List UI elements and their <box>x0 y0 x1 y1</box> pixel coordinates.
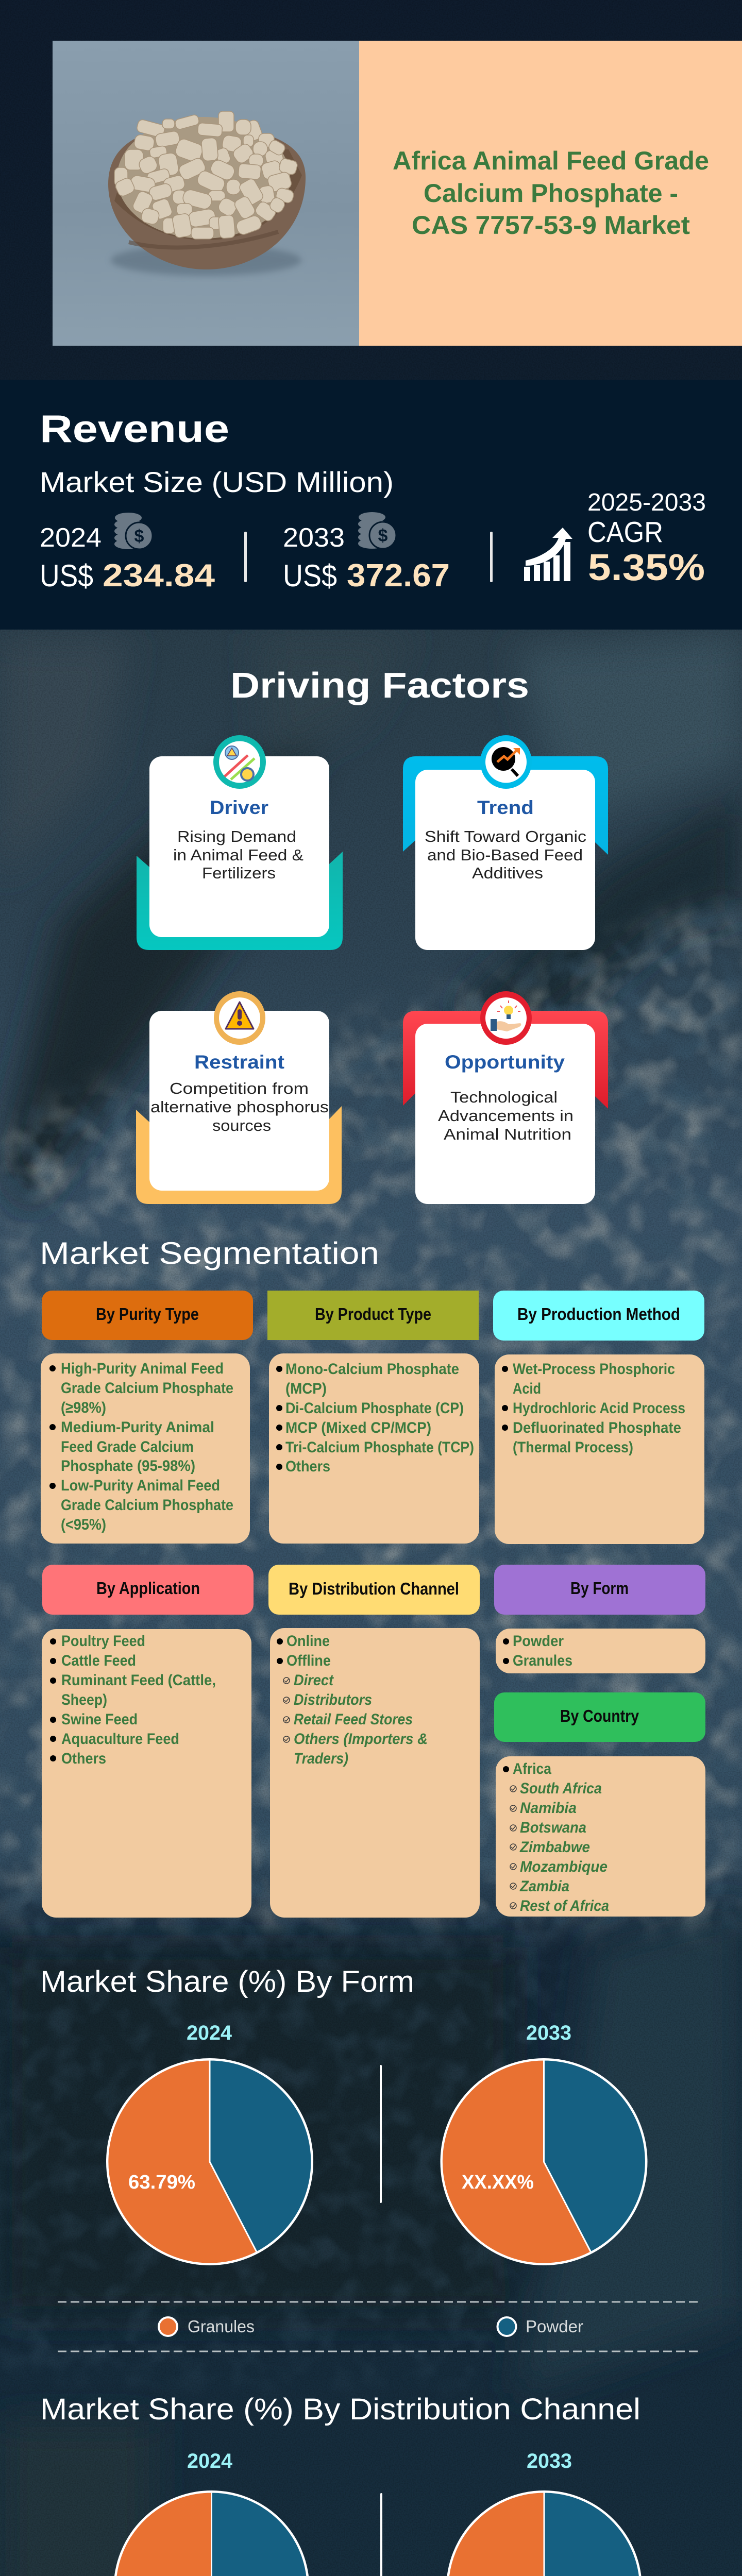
card: opportunity <box>403 991 608 1204</box>
segment: by form <box>494 1565 705 1673</box>
text: opportunity description: Technological <box>450 1088 558 1106</box>
segment: by purity type: Medium-Purity Animal <box>61 1419 214 1436</box>
subheading: market size: Market Size (USD Million) <box>40 466 394 498</box>
pie chart: form 2033: 2033 <box>526 2022 571 2044</box>
segment: by application: Sheep) <box>61 1691 107 1708</box>
icon: restraint <box>214 991 265 1045</box>
text: trend description <box>425 827 586 882</box>
card: driver <box>137 735 343 950</box>
text: restraint description: sources <box>212 1116 271 1134</box>
legend: form: Powder <box>526 2317 583 2336</box>
stat: cagr: CAGR <box>587 516 663 549</box>
segment: by purity type: Phosphate (95-98%) <box>61 1458 195 1475</box>
segment: by production method: Acid <box>513 1380 541 1397</box>
segment: by production method: Wet-Process Phosphoric <box>513 1361 675 1378</box>
segment: by production method: Hydrochloric Acid Process <box>513 1400 685 1417</box>
segment: by country: Zimbabwe <box>519 1839 590 1856</box>
segment: by production method: Defluorinated Phosphate <box>513 1419 681 1436</box>
segment: by product type: MCP (Mixed CP/MCP) <box>285 1419 431 1436</box>
segment: by distribution channel: Retail Feed Stores <box>294 1711 413 1728</box>
segment: by product type: Others <box>285 1458 330 1475</box>
segment: by form: Granules <box>513 1652 572 1669</box>
segment: by application: Swine Feed <box>61 1711 138 1728</box>
segment: by purity type: (<95%) <box>61 1516 106 1533</box>
page background <box>0 630 742 2576</box>
title block: Calcium Phosphate - <box>424 179 678 208</box>
pie chart: distribution 2024: 2024 <box>187 2450 233 2472</box>
stat: 2024: US$ <box>40 558 93 593</box>
pie chart: distribution 2024 <box>114 2450 308 2576</box>
stat: cagr: 5.35% <box>588 547 705 588</box>
segment: by application: Poultry Feed <box>61 1633 145 1650</box>
segment: by application: Cattle Feed <box>61 1652 136 1669</box>
icon: growth chart <box>524 528 572 581</box>
text: opportunity description: Advancements in <box>438 1107 574 1125</box>
stat: 2033: 372.67 <box>347 558 450 594</box>
segment: by application: Others <box>61 1750 106 1767</box>
icon: coins 2024 <box>114 513 153 549</box>
text: restraint description <box>150 1079 329 1134</box>
text: driver description: Fertilizers <box>202 864 276 882</box>
stat: 2024 <box>40 523 215 594</box>
segment: by distribution channel: Online <box>286 1633 330 1650</box>
heading: market share by distribution channel: Market Share (%) By Distribution Channel <box>40 2393 640 2426</box>
segment: by purity type: By Purity Type <box>96 1304 199 1324</box>
pie chart: distribution 2033 <box>447 2450 641 2576</box>
segment: by form: By Form <box>570 1579 629 1598</box>
stat: cagr: 2025-2033 <box>587 489 706 516</box>
heading: market segmentation: Market Segmentation <box>40 1236 379 1270</box>
title block: Africa Animal Feed Grade <box>393 146 709 175</box>
segment: by distribution channel: Traders) <box>294 1750 348 1767</box>
segment: by purity type: Grade Calcium Phosphate <box>61 1380 233 1397</box>
pie chart: form 2024: 2024 <box>187 2022 232 2044</box>
text: driver description <box>173 827 303 882</box>
text: trend description: Additives <box>472 864 543 882</box>
icon: opportunity <box>480 991 532 1045</box>
segment: by country: By Country <box>560 1706 639 1725</box>
pie chart: form 2033: XX.XX% <box>462 2172 534 2193</box>
text: trend description: and Bio-Based Feed <box>427 846 583 864</box>
text: driver description: in Animal Feed & <box>173 846 303 864</box>
legend: form <box>159 2317 583 2336</box>
heading: restraint: Restraint <box>194 1052 284 1073</box>
text: driver description: Rising Demand <box>177 827 296 845</box>
hero panel <box>53 41 742 346</box>
heading: opportunity: Opportunity <box>445 1052 565 1073</box>
segment: by product type: (MCP) <box>285 1380 327 1397</box>
stat: 2033 <box>283 523 450 594</box>
segment: by country: South Africa <box>520 1780 602 1797</box>
segment: by purity type: Grade Calcium Phosphate <box>61 1497 233 1514</box>
segment: by purity type <box>41 1291 253 1544</box>
segment: by purity type: Feed Grade Calcium <box>61 1438 194 1455</box>
segment: by country: Rest of Africa <box>520 1897 609 1914</box>
stat: 2033: 2033 <box>283 523 345 553</box>
pie chart: distribution 2033: 2033 <box>527 2450 572 2472</box>
icon: coins 2033: $ <box>378 526 388 546</box>
segment: by application: Ruminant Feed (Cattle, <box>61 1672 216 1689</box>
segment: by product type: By Product Type <box>315 1304 431 1324</box>
icon: driver <box>213 735 266 789</box>
segment: by purity type: Low-Purity Animal Feed <box>61 1477 220 1494</box>
segment: by distribution channel: Distributors <box>294 1691 372 1708</box>
heading: revenue: Revenue <box>40 407 229 450</box>
segment: by country: Mozambique <box>520 1858 608 1875</box>
segment: by application: By Application <box>96 1579 200 1598</box>
segment: by product type: Tri-Calcium Phosphate (TCP) <box>285 1439 474 1456</box>
stat: 2024: 2024 <box>40 523 102 553</box>
pie chart: form 2024: 63.79% <box>128 2172 195 2193</box>
segment: by distribution channel: Others (Importers & <box>294 1731 428 1748</box>
segment: by product type: Di-Calcium Phosphate (CP) <box>285 1400 464 1417</box>
segment: by production method <box>493 1291 704 1544</box>
segment: by form: Powder <box>513 1633 564 1650</box>
segment: by distribution channel <box>268 1565 480 1918</box>
text: opportunity description: Animal Nutrition <box>444 1125 571 1143</box>
stat: 2024: 234.84 <box>103 558 215 594</box>
segment: by purity type: High-Purity Animal Feed <box>61 1360 224 1377</box>
segment: by country: Botswana <box>520 1819 586 1836</box>
text: restraint description: Competition from <box>170 1079 309 1097</box>
segment: by country: Africa <box>513 1760 551 1777</box>
segment: by application <box>42 1565 254 1918</box>
segment: by product type <box>267 1291 479 1544</box>
legend: form: Granules <box>188 2317 255 2336</box>
text: restraint description: alternative phosphorus <box>150 1098 329 1116</box>
card: restraint <box>136 991 342 1204</box>
heading: driving factors: Driving Factors <box>230 665 529 705</box>
title block: CAS 7757-53-9 Market <box>412 211 690 240</box>
panel: revenue <box>0 380 742 630</box>
heading: driver: Driver <box>210 797 268 818</box>
text: trend description: Shift Toward Organic <box>425 827 586 845</box>
product photo <box>53 41 359 346</box>
stat: cagr <box>587 489 706 588</box>
icon: coins 2033 <box>358 512 396 549</box>
card: trend <box>403 735 608 950</box>
heading: trend: Trend <box>477 797 534 818</box>
segment: by product type: Mono-Calcium Phosphate <box>285 1361 459 1378</box>
segment: by application: Aquaculture Feed <box>61 1731 179 1748</box>
stat: 2033: US$ <box>283 558 337 593</box>
segment: by distribution channel: By Distribution Channel <box>289 1579 459 1598</box>
segment: by country: Zambia <box>519 1878 569 1895</box>
segment: by country: Namibia <box>520 1800 577 1817</box>
segment: by distribution channel: Offline <box>286 1652 331 1669</box>
title block <box>359 41 742 346</box>
segment: by production method: By Production Method <box>517 1304 680 1324</box>
segment: by purity type: (≥98%) <box>61 1399 106 1416</box>
pie chart: form 2024 <box>107 2022 312 2264</box>
icon: coins 2024: $ <box>134 527 144 546</box>
icon: trend <box>480 735 532 789</box>
segment: by country <box>494 1692 705 1917</box>
segment: by production method: (Thermal Process) <box>513 1439 633 1456</box>
pie chart: form 2033 <box>441 2022 646 2264</box>
segment: by distribution channel: Direct <box>294 1672 334 1689</box>
text: opportunity description <box>438 1088 574 1143</box>
heading: market share by form: Market Share (%) By Form <box>40 1965 414 1998</box>
